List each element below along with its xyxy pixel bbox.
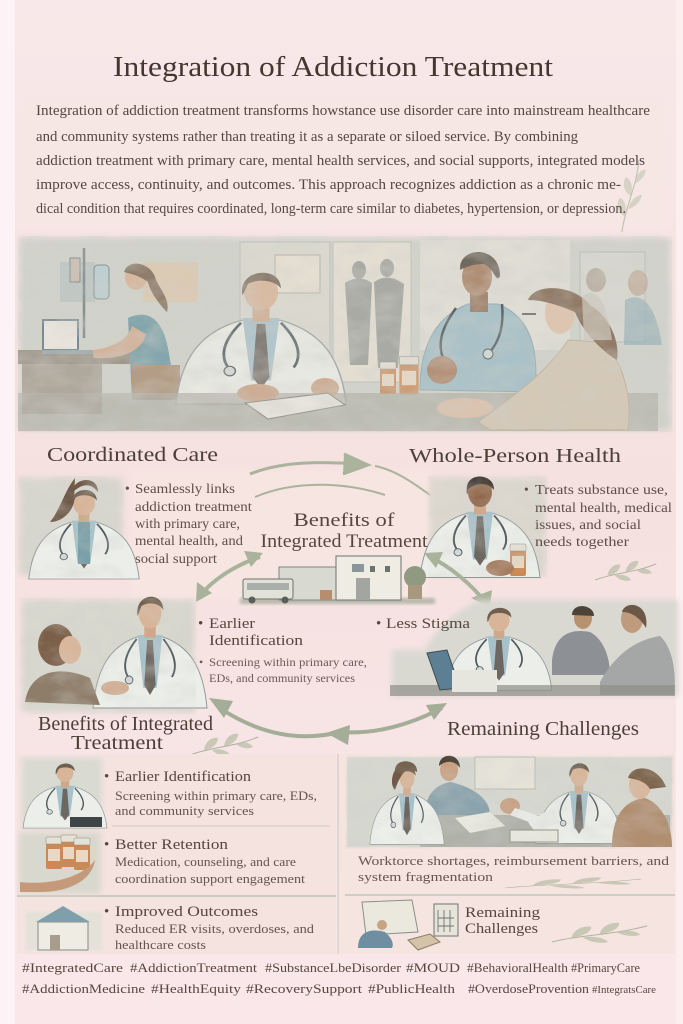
text: workforce challenges: system fragmentation [358, 870, 494, 884]
icon: community clinic [26, 906, 102, 950]
text: earlier identification callout: EDs, and community services [209, 671, 355, 685]
doctor [176, 273, 346, 404]
panel: whole-person portrait [420, 476, 547, 578]
panel: remaining challenges [338, 754, 675, 954]
text: coordinated care bullet [125, 481, 252, 566]
text: remaining challenges label: Remaining [465, 905, 541, 921]
center heading: Benefits of [294, 510, 395, 531]
heading: remaining challenges: Remaining Challenges [447, 719, 639, 740]
text: whole-person bullet [524, 482, 672, 581]
text: whole-person bullet: needs together [535, 534, 630, 549]
text: whole-person bullet: mental health, medical [535, 500, 672, 515]
hashtags: #PublicHealth [368, 981, 456, 996]
intro paragraph: dical condition that requires coordinated, long-term care similar to diabetes, hypertension, or depression. [36, 201, 626, 217]
arrow: upper right arrowheads [424, 552, 492, 607]
doctor arms and notebook [237, 378, 345, 419]
text: coordinated care bullet: • [125, 481, 130, 496]
heading: coordinated care: Coordinated Care [47, 445, 218, 466]
center heading [260, 510, 428, 552]
text: improved outcomes [104, 904, 315, 952]
text: earlier identification callout: • [199, 655, 203, 669]
hashtags [22, 960, 656, 996]
text: better retention: coordination support engagement [115, 872, 306, 886]
text: whole-person bullet: issues, and social [535, 517, 641, 532]
title: Integration of Addiction Treatment [113, 52, 553, 83]
intro paragraph [18, 96, 670, 232]
doctor with blue shirt [420, 252, 536, 392]
icon: paperwork and clinician [358, 900, 458, 950]
text: earlier identification callout: Identification [209, 633, 304, 649]
text: remaining challenges label: Challenges [465, 921, 538, 937]
text: better retention: Better Retention [115, 837, 229, 853]
hashtags: #HealthEquity [151, 981, 242, 996]
arrow: upper right double arrow [428, 556, 485, 602]
desk with laptop [18, 320, 132, 414]
hashtags: #BehavioralHealth [467, 960, 569, 975]
icon: doctor portrait [22, 758, 107, 828]
text: better retention [104, 837, 306, 886]
text: coordinated care bullet: with primary care, [135, 516, 240, 531]
intro paragraph: improve access, continuity, and outcomes. This approach recognizes addiction as a chronic me- [36, 177, 621, 193]
panel: benefits list [17, 754, 336, 954]
hashtags: #IntegratsCare [592, 984, 656, 996]
text: improved outcomes: Reduced ER visits, overdoses, and [115, 922, 315, 936]
hashtags: #AddictionMedicine [22, 981, 145, 996]
nurse [92, 264, 180, 400]
hashtags: #IntegratedCare [22, 960, 123, 975]
panel: coordinated care portrait [18, 476, 139, 579]
arrow: lower cycle arrow [209, 698, 447, 745]
hashtags: #PrimaryCare [571, 960, 640, 975]
panel: consultation with tablet [390, 600, 678, 696]
text: coordinated care bullet: mental health, and [135, 533, 243, 548]
text: earlier identification: and community services [115, 804, 254, 818]
arrow: upper left double arrow [198, 557, 260, 598]
text: earlier identification callout: • [198, 616, 203, 632]
text: improved outcomes: healthcare costs [115, 938, 206, 952]
text: workforce challenges: Worktorce shortages, reimbursement barriers, and [358, 854, 670, 868]
text: earlier identification: • [104, 769, 109, 785]
icon: clinic building [240, 556, 435, 604]
text: earlier identification: Earlier Identification [115, 769, 252, 785]
text: less stigma callout: Less Stigma [386, 616, 470, 632]
heading: benefits of integrated treatment: Benefits of Integrated [38, 714, 213, 735]
woman with glasses [437, 288, 629, 430]
text: earlier identification [104, 769, 317, 818]
text: remaining challenges label [465, 905, 647, 943]
arrow: upper left arrowheads [196, 551, 263, 602]
hashtags: #MOUD [406, 960, 460, 975]
text: improved outcomes: Improved Outcomes [115, 904, 258, 920]
text: earlier identification: Screening within primary care, EDs, [115, 789, 317, 803]
arrow: top cycle arrow [250, 454, 430, 497]
text: whole-person bullet: • [524, 482, 529, 497]
text: whole-person bullet: Treats substance use, [535, 482, 668, 497]
icon: hand holding medication [19, 832, 101, 894]
hashtags: #OverdoseProvention [468, 981, 590, 996]
text: coordinated care bullet: Seamlessly links [135, 481, 235, 496]
text: less stigma callout: • [376, 616, 381, 632]
heading: whole-person health: Whole-Person Health [409, 446, 621, 467]
heading: benefits of integrated treatment [38, 714, 258, 756]
intro paragraph: and community systems rather than treating it as a separate or siloed service. By combining [36, 129, 578, 145]
team meeting illustration [345, 755, 674, 849]
IV stand [70, 248, 109, 338]
text: earlier identification callout [198, 616, 367, 685]
background staff [582, 268, 662, 345]
text: coordinated care bullet: addiction treatment [135, 499, 252, 514]
medication bottles [380, 356, 419, 395]
text: coordinated care bullet: social support [135, 551, 217, 566]
text: improved outcomes: • [104, 904, 109, 920]
hashtags: #SubstanceLbeDisorder [265, 960, 402, 975]
heading: benefits of integrated treatment: Treatment [71, 733, 164, 754]
panel: doctor and patient portrait [20, 597, 207, 714]
text: better retention: Medication, counseling, and care [115, 855, 296, 869]
text: earlier identification callout: Screening within primary care, [209, 655, 367, 669]
center heading: Integrated Treatment [260, 531, 428, 552]
silhouettes in doorway [345, 259, 404, 368]
table [18, 393, 658, 431]
hashtags: #RecoverySupport [246, 981, 362, 996]
text: better retention: • [104, 837, 109, 853]
intro paragraph: Integration of addiction treatment transforms howstance use disorder care into mainstream healthcare [36, 103, 650, 119]
text: workforce challenges [358, 854, 670, 888]
intro paragraph: addiction treatment with primary care, mental health services, and social supports, integrated models [36, 153, 645, 169]
text: earlier identification callout: Earlier [209, 616, 255, 632]
hero illustration: clinical team at table [18, 236, 672, 432]
hashtags: #AddictionTreatment [130, 960, 257, 975]
